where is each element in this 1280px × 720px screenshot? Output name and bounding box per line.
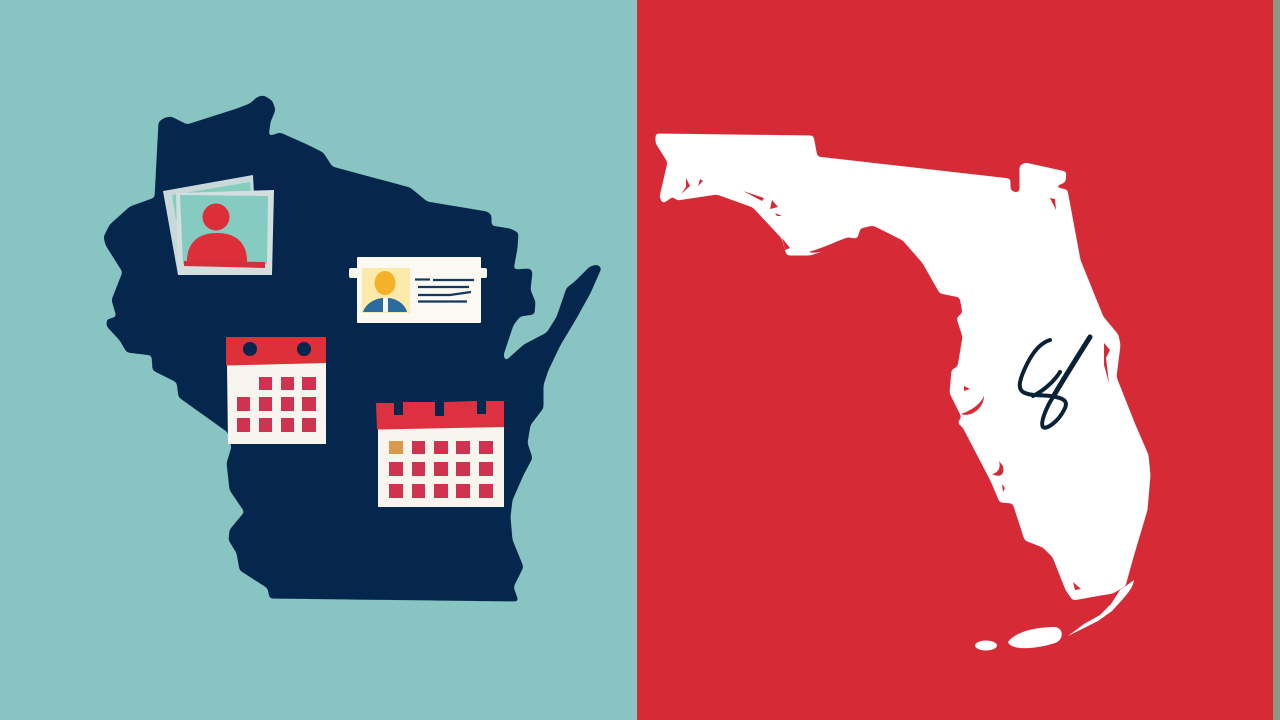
person body xyxy=(187,233,247,264)
photo base strip xyxy=(184,261,265,268)
calendar header xyxy=(226,337,326,366)
coastline inlets xyxy=(681,178,1110,590)
icon: calendar right xyxy=(376,401,504,507)
date squares xyxy=(389,441,493,498)
binding holes xyxy=(243,342,257,356)
calendar header xyxy=(376,401,504,430)
card side tabs xyxy=(349,268,487,278)
person head xyxy=(202,204,230,230)
calendar page xyxy=(227,362,326,444)
icon: ID card xyxy=(349,257,487,323)
icon: calendar left xyxy=(226,337,326,444)
panel: red background xyxy=(637,0,1273,720)
front photo xyxy=(176,190,274,275)
mainland xyxy=(656,134,1150,600)
icon: stacked photos xyxy=(163,175,274,275)
card text lines xyxy=(415,280,474,302)
back photo xyxy=(163,175,254,275)
card body xyxy=(357,257,481,323)
portrait background xyxy=(362,268,410,313)
portrait torso xyxy=(363,298,407,312)
Florida map xyxy=(656,134,1150,650)
right edge strip xyxy=(1273,0,1280,720)
panel: teal background xyxy=(0,0,637,720)
portrait shirt xyxy=(383,298,388,312)
calendar page xyxy=(378,426,504,507)
signature xyxy=(1020,337,1090,428)
Florida Keys xyxy=(975,580,1134,650)
date squares xyxy=(237,377,316,432)
Wisconsin map xyxy=(104,96,601,601)
portrait head xyxy=(374,271,396,295)
highlighted date xyxy=(389,441,403,454)
